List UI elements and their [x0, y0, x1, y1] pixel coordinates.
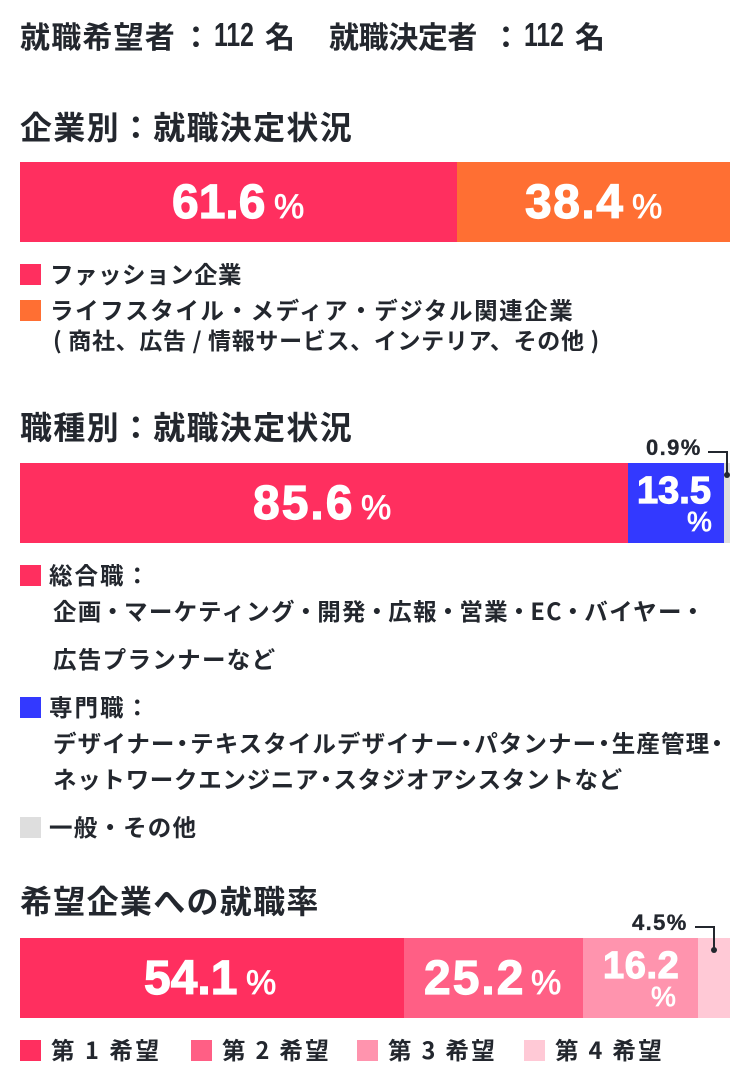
bar chart: by preference [20, 938, 730, 1018]
colon: ： [491, 13, 521, 57]
legend label: lifestyle: ライフスタイル・メディア・デジタル関連企業 [50, 292, 574, 326]
callout: 4.5% [632, 910, 717, 953]
segment: third choice 16.2%: 16.2 [603, 945, 679, 987]
heading: by job type: 職種別：就職決定状況 [20, 403, 353, 449]
heading: placement by preference: 希望企業への就職率 [20, 877, 320, 923]
legend item: lifestyle [20, 300, 41, 321]
legend: by job type [20, 557, 730, 843]
general job list line 1: 企画・マーケティング・開発・広報・営業・EC・バイヤー・ [53, 593, 706, 627]
legend item: fashion [20, 264, 41, 285]
segment: fashion 61.6% [20, 162, 457, 242]
segment: first choice 54.1%: 54.1 [144, 952, 237, 1005]
specialist job list line 1: デザイナー・テキスタイルデザイナー・パタンナー・生産管理・ [53, 725, 730, 759]
legend label: general: 総合職： [49, 557, 151, 591]
segment: third choice 16.2% [583, 938, 698, 1018]
number: placements: 112 [524, 16, 564, 53]
legend label: third choice: 第 3 希望 [388, 1032, 497, 1066]
segment: lifestyle 38.4%: 38.4 [525, 176, 624, 229]
legend label: fourth choice: 第 4 希望 [555, 1032, 664, 1066]
legend label: fashion: ファッション企業 [50, 256, 242, 290]
legend: by company [20, 256, 600, 356]
segment: specialist 13.5% [628, 463, 724, 543]
legend item: third choice [357, 1040, 378, 1061]
unit: 名 [575, 13, 605, 57]
segment: specialist 13.5%: % [687, 506, 712, 537]
specialist job list line 2: ネットワークエンジニア・スタジオアシスタントなど [53, 761, 623, 795]
callout: 4.5%: 4.5% [632, 910, 688, 935]
legend note: lifestyle detail: ( 商社、広告 / 情報サービス、インテリア、その他 ) [53, 322, 600, 356]
general job list line 2: 広告プランナーなど [53, 641, 276, 675]
legend item: first choice [20, 1040, 41, 1061]
legend label: specialist: 専門職： [49, 689, 151, 723]
heading: applicants and placements [20, 13, 605, 57]
segment: first choice 54.1% [20, 938, 404, 1018]
segment: second choice 25.2%: % [531, 964, 561, 1002]
segment: second choice 25.2%: 25.2 [424, 952, 525, 1005]
segment: fashion 61.6%: % [274, 188, 304, 226]
segment: specialist 13.5%: 13.5 [637, 470, 711, 512]
segment: second choice 25.2% [404, 938, 583, 1018]
segment: general 85.6% [20, 463, 628, 543]
colon: ： [181, 13, 211, 57]
segment: lifestyle 38.4% [457, 162, 730, 242]
legend label: other: 一般・その他 [49, 809, 197, 843]
label: applicants: 就職希望者 [20, 13, 176, 57]
legend item: second choice [191, 1040, 212, 1061]
callout: 0.9%: 0.9% [646, 435, 702, 460]
segment: third choice 16.2%: % [651, 981, 676, 1012]
callout: 0.9% [646, 435, 730, 478]
segment: general 85.6%: % [361, 489, 391, 527]
segment: first choice 54.1%: % [246, 964, 276, 1002]
bar chart: by job type [20, 463, 730, 543]
segment: fourth choice 4.5% [698, 938, 730, 1018]
legend item: fourth choice [524, 1040, 545, 1061]
segment: other 0.9% [724, 463, 730, 543]
legend item: specialist [20, 697, 41, 718]
label: placements: 就職決定者 [329, 13, 477, 57]
legend label: first choice: 第 1 希望 [51, 1032, 162, 1066]
number: applicants: 112 [214, 16, 254, 53]
legend: by preference [20, 1032, 664, 1066]
legend item: other [20, 817, 41, 838]
legend item: general [20, 565, 41, 586]
heading: by company: 企業別：就職決定状況 [20, 103, 353, 149]
segment: general 85.6%: 85.6 [253, 477, 354, 530]
unit: 名 [265, 13, 295, 57]
segment: lifestyle 38.4%: % [632, 188, 662, 226]
bar chart: by company [20, 162, 730, 242]
legend label: second choice: 第 2 希望 [222, 1032, 331, 1066]
segment: fashion 61.6%: 61.6 [172, 176, 265, 229]
